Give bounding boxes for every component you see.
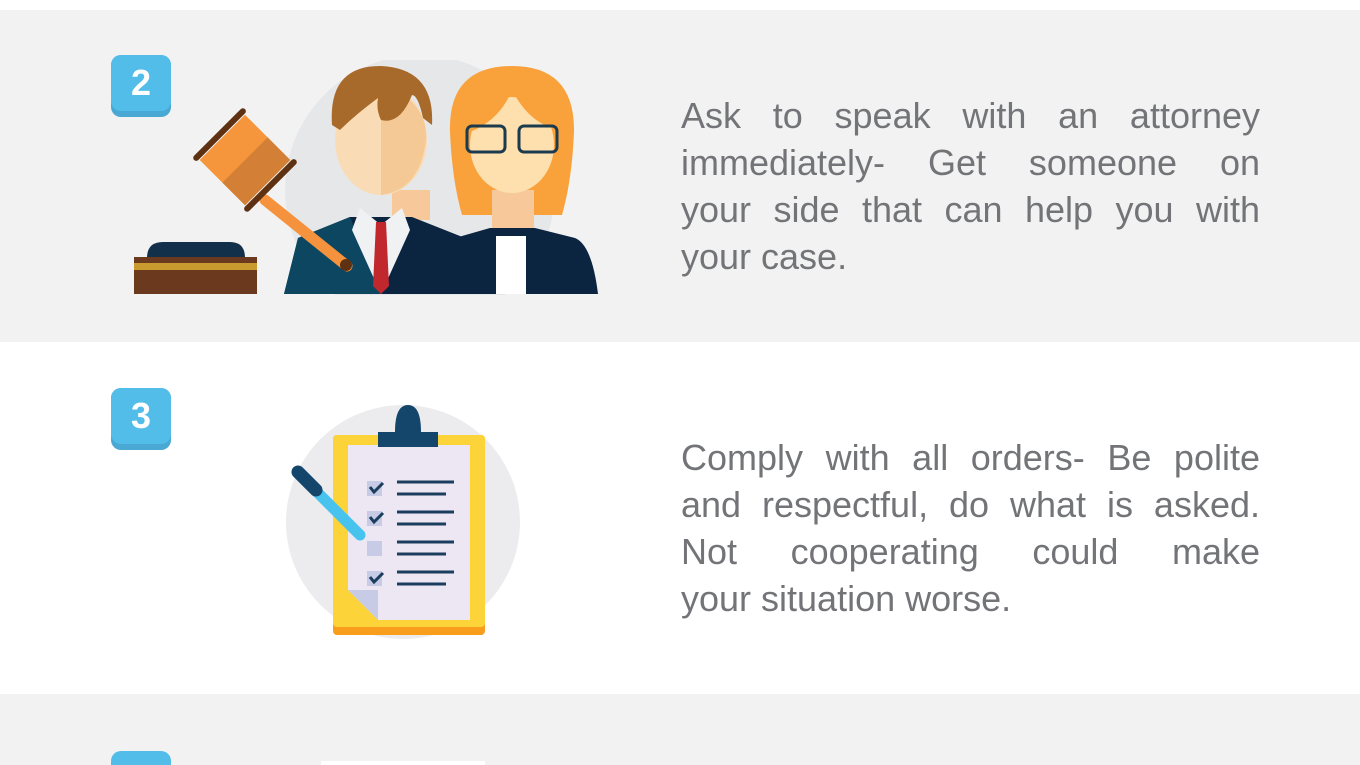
text: step 3: Not cooperating could make [681,531,1260,572]
badge: 4 (partial) [111,751,171,765]
panel: step 4 background [0,694,1360,765]
badge: 2: 2 [131,62,151,103]
text: step 2: Ask to speak with an attorney [681,95,1260,136]
text: step 2: your side that can help you with [681,189,1260,230]
panel: step 2 background [0,10,1360,342]
icon: step 4 (partial) [321,761,485,765]
text: step 3: Comply with all orders- Be polite [681,437,1260,478]
text: step 3: and respectful, do what is asked. [681,484,1260,525]
text: step 2: immediately- Get someone on [681,142,1260,183]
text: step 3: your situation worse. [681,578,1011,619]
gavel handle and head (in front) [265,200,347,266]
text: step 2 [681,95,1260,277]
text: step 3 [681,437,1260,619]
icon: gavel and attorneys [134,60,598,295]
text: step 2: your case. [681,236,847,277]
icon: clipboard checklist [286,405,520,639]
badge: 2 [111,55,171,117]
gavel base [147,242,245,258]
man [392,190,430,220]
badge: 3: 3 [131,395,151,436]
woman [450,66,574,215]
badge: 3 [111,388,171,450]
